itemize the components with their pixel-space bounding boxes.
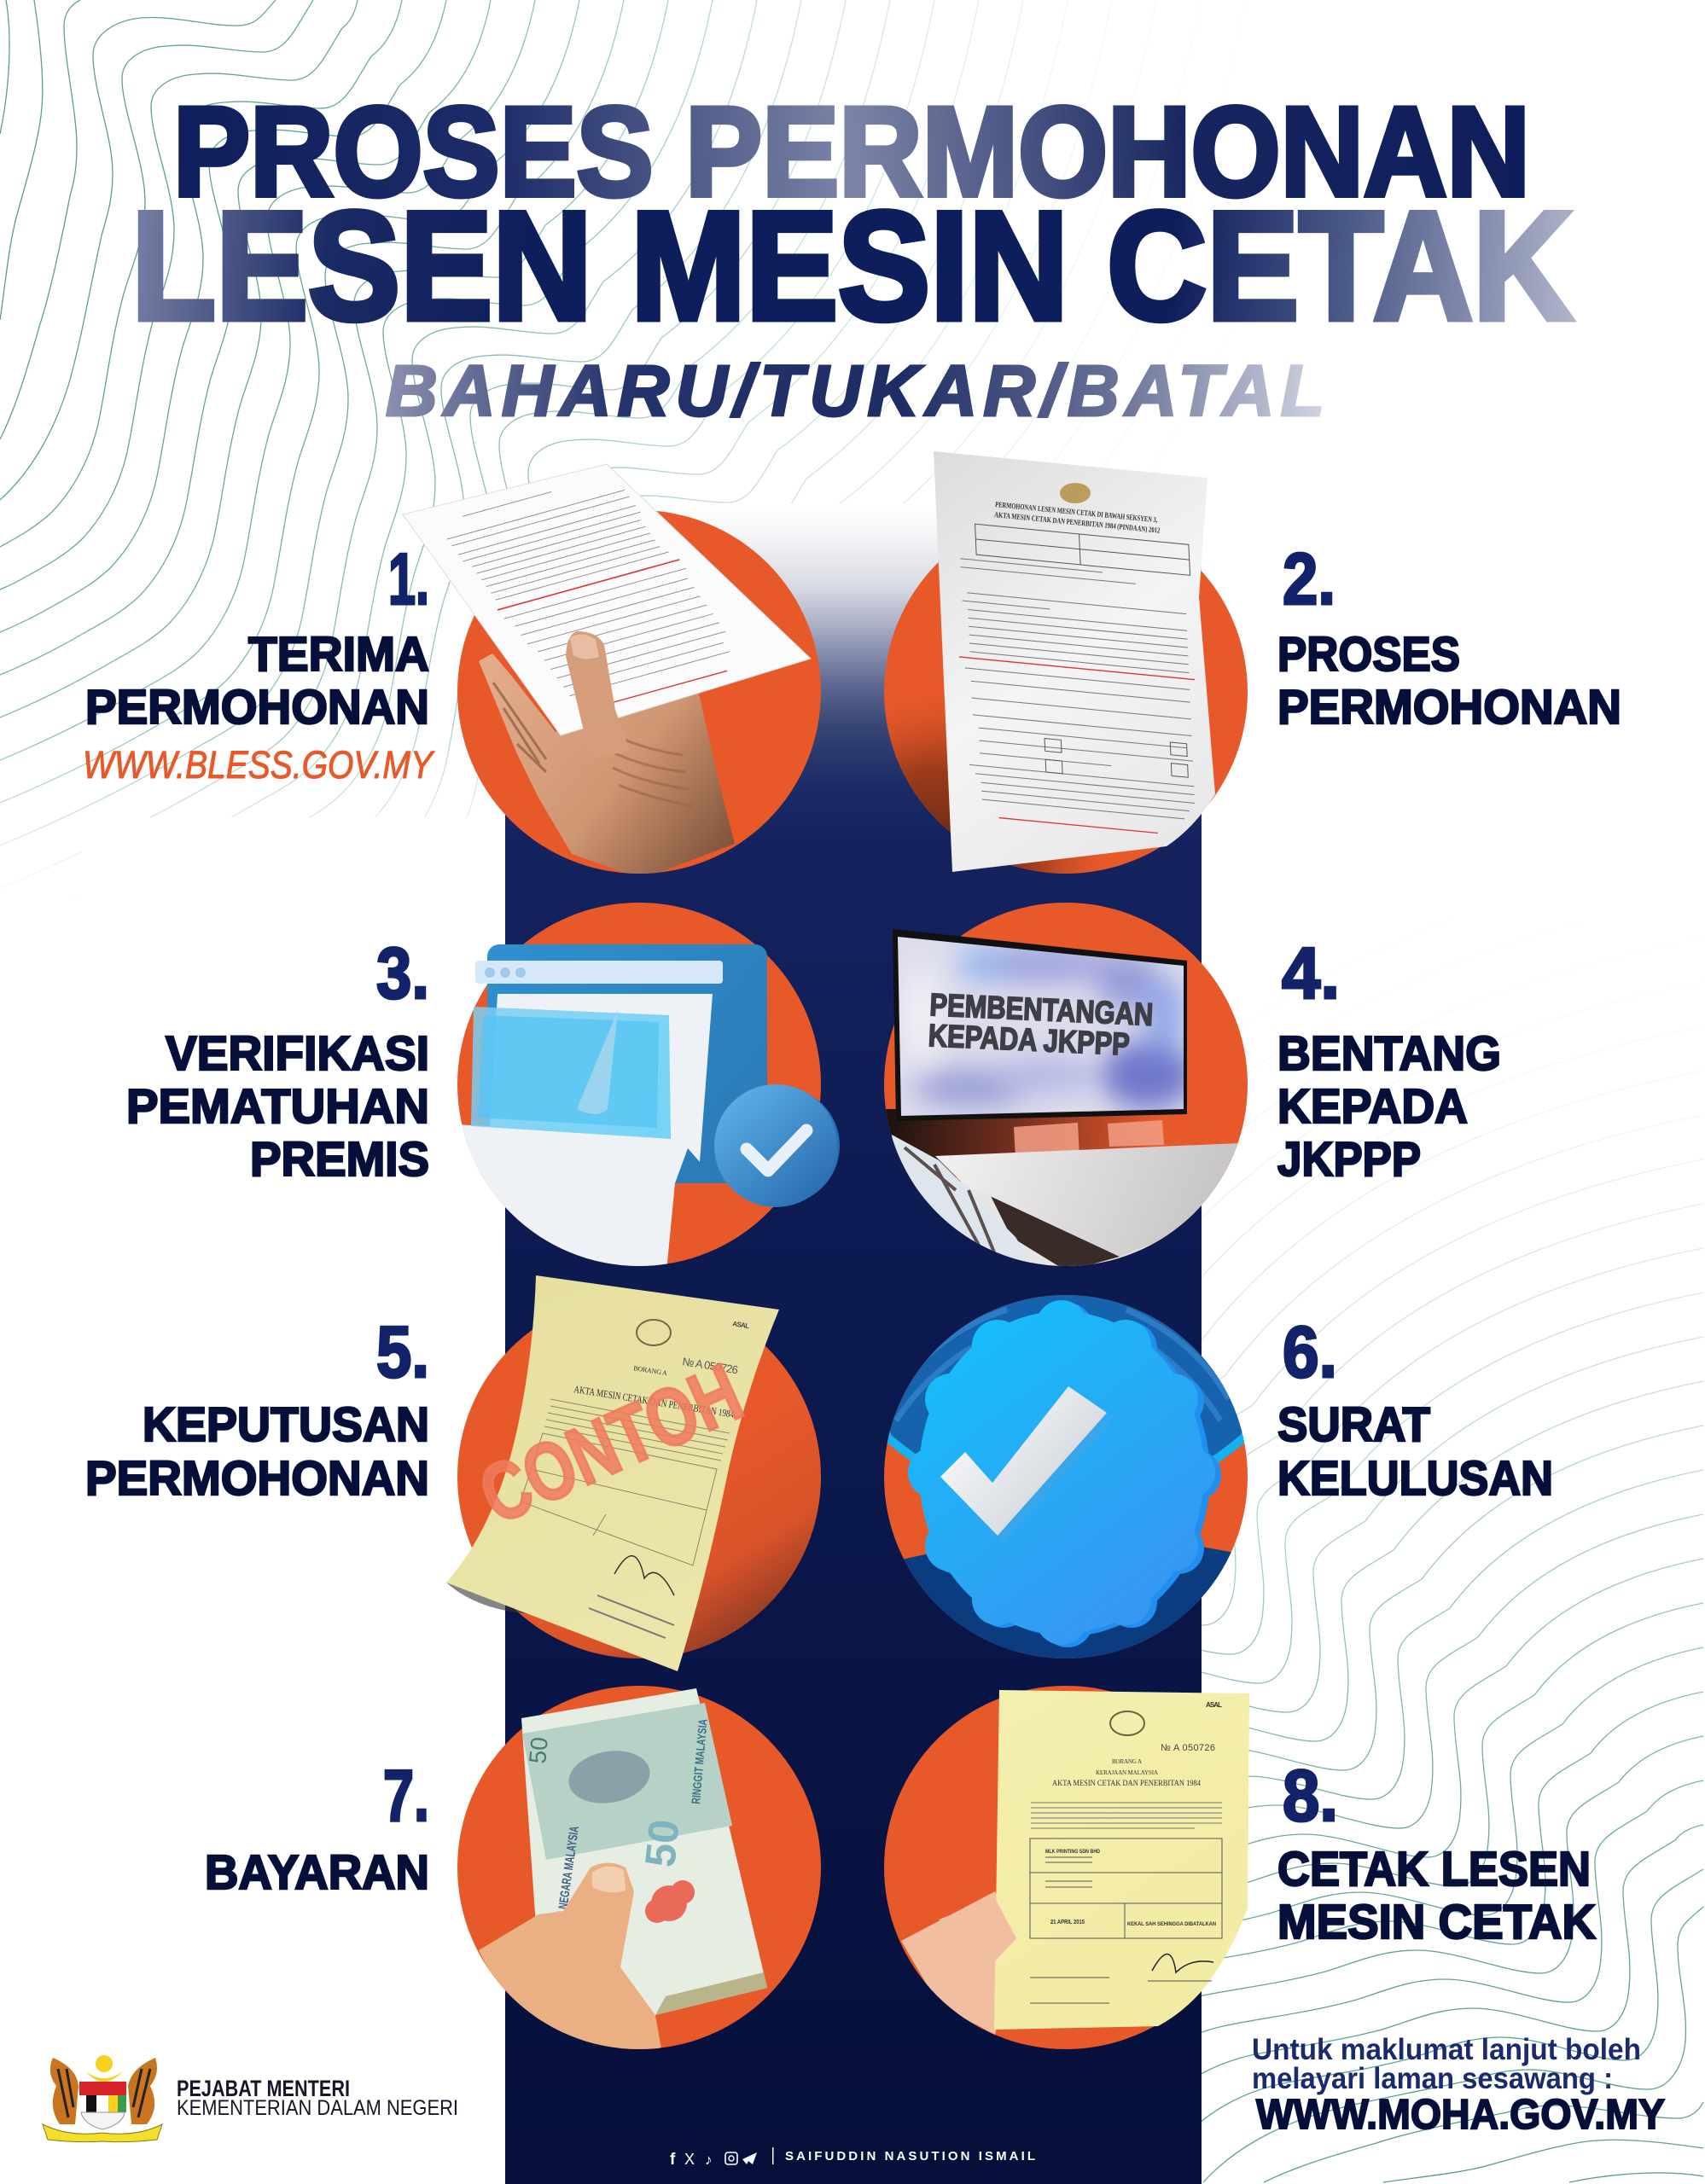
heading: TERIMA [248,627,429,682]
more information callout: Untuk maklumat lanjut boleh [1252,2033,1641,2066]
step 8 illustration: printed licence held in hand: AKTA MESIN CETAK DAN PENERBITAN 1984 [1052,1779,1201,1787]
step 4 label: JKPPP [1277,1132,1421,1187]
step 6 label: KELULUSAN [1277,1451,1553,1506]
step 5 label: PERMOHONAN [85,1451,429,1506]
icons: social platforms [670,2151,757,2169]
icon: coat of arms [43,2055,162,2142]
step 4 label [1277,933,1501,1187]
number 1: 1. [388,539,429,620]
heading: VERIFIKASI [166,1026,429,1081]
step 8 illustration: printed licence held in hand: KERAJAAN MALAYSIA [1096,1769,1158,1776]
number 8: 8. [1283,1756,1338,1837]
social media footer [670,2147,1035,2169]
step 7 illustration: hand with banknote: 50 [636,1817,689,1869]
step 8 illustration: printed licence held in hand: № A 050726 [1161,1743,1215,1753]
step 1 label: PERMOHONAN [85,680,429,735]
icons: social platforms: f [670,2151,676,2169]
step 7 illustration: hand with banknote: 50 [524,1736,553,1764]
screen caption: KEPADA JKPPP [928,1018,1131,1062]
title [131,80,1573,431]
step 1 label [83,539,435,787]
website: WWW.MOHA.GOV.MY [1256,2092,1665,2138]
heading: KEPUTUSAN [143,1397,429,1452]
account name: SAIFUDDIN NASUTION ISMAIL [785,2149,1035,2164]
step 1 illustration: hand holding form [403,464,821,879]
heading: PROSES [1277,627,1460,682]
step 4 label: KEPADA [1277,1079,1468,1134]
step 5 label [85,1312,429,1506]
step 8 label: MESIN CETAK [1277,1895,1596,1949]
step 3 illustration: browser window with check badge [452,903,840,1271]
number 6: 6. [1283,1312,1337,1393]
step 7 illustration: hand with banknote [457,1686,821,2049]
icons: social platforms: X [684,2151,695,2168]
step 2 label: PERMOHONAN [1277,680,1621,735]
step 8 illustration: printed licence held in hand: 21 APRIL 2015 [1050,1920,1085,1926]
form heading [994,500,1161,535]
form heading: AKTA MESIN CETAK DAN PENERBITAN 1984 (PINDAAN) 2012 [994,510,1161,535]
step 3 label [126,933,429,1187]
number 2: 2. [1283,539,1335,620]
step 5 illustration: sample licence with CONTOH stamp: AKTA MESIN CETAK DAN PENERBITAN 1984 [573,1383,735,1420]
number 4: 4. [1282,933,1340,1014]
ministry logo and name [43,2055,458,2142]
step 2 illustration: application form [884,451,1248,874]
heading: BAYARAN [205,1845,429,1900]
ministry name: PEJABAT MENTERI [177,2076,350,2101]
step 5 illustration: sample licence with CONTOH stamp: № A 050726 [682,1355,739,1376]
step 5 illustration: sample licence with CONTOH stamp: BORANG A [633,1364,668,1377]
step 3 label: PEMATUHAN [126,1079,429,1134]
step 8 illustration: printed licence held in hand: ASAL [1206,1701,1222,1709]
step 8 illustration: printed licence held in hand [884,1686,1249,2049]
step 2 label [1277,539,1621,735]
step 8 illustration: printed licence held in hand: MLK PRINTING SDN BHD [1045,1850,1101,1855]
step 6 illustration: verified blue badge [884,1295,1248,1658]
heading: CETAK LESEN [1277,1842,1591,1896]
title line 2: LESEN MESIN CETAK [131,180,1573,352]
step 3 label: PREMIS [250,1132,429,1187]
step 7 illustration: hand with banknote: RINGGIT MALAYSIA [689,1718,710,1804]
heading: SURAT [1277,1397,1430,1452]
icons: social platforms: ♪ [705,2152,712,2168]
CONTOH stamp: CONTOH [467,1346,755,1542]
step 7 label [205,1756,429,1900]
more information callout: melayari laman sesawang : [1252,2062,1613,2095]
website link: WWW.BLESS.GOV.MY [83,743,435,787]
step 5 illustration: sample licence with CONTOH stamp: ASAL [732,1320,750,1330]
step 8 illustration: printed licence held in hand: BORANG A [1112,1758,1142,1765]
central navy band [505,503,1202,2184]
step 8 label [1277,1756,1596,1949]
more information callout [1252,2033,1665,2138]
screen caption [928,987,1154,1063]
step 4 illustration: meeting room screen [879,903,1254,1275]
step 7 illustration: hand with banknote: BANK NEGARA MALAYSIA [552,1825,582,1937]
number 7: 7. [383,1756,429,1837]
form heading: PERMOHONAN LESEN MESIN CETAK DI BAWAH SEKSYEN 3, [995,500,1158,524]
number 3: 3. [376,933,429,1014]
screen caption: PEMBENTANGAN [929,987,1154,1032]
subtitle: BAHARU/TUKAR/BATAL [386,351,1324,431]
step 6 label [1277,1312,1553,1506]
number 5: 5. [376,1312,429,1393]
ministry logo and name: KEMENTERIAN DALAM NEGERI [177,2096,458,2120]
step 5 illustration: sample licence with CONTOH stamp [446,1275,821,1671]
title line 1: PROSES PERMOHONAN [173,80,1530,223]
heading: BENTANG [1277,1026,1501,1081]
step 8 illustration: printed licence held in hand: KEKAL SAH SEHINGGA DIBATALKAN [1127,1922,1216,1927]
